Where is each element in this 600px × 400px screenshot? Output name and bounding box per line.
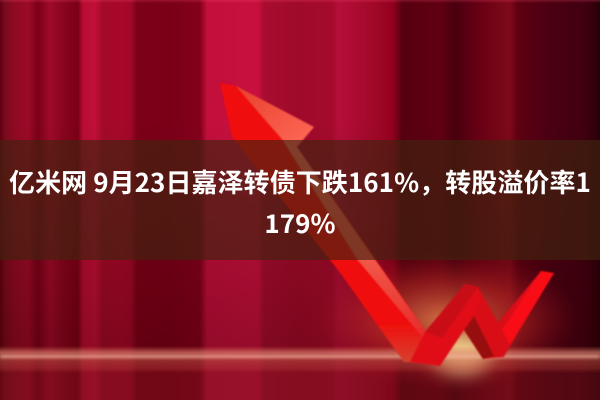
glow halo behind zigzag	[310, 250, 580, 390]
title text: 179%	[264, 204, 336, 241]
arrow head light face	[236, 86, 314, 147]
title text	[9, 163, 591, 241]
title band overlay	[0, 140, 600, 260]
floor light streak	[0, 346, 600, 400]
icon: arrow head and shaft	[220, 83, 432, 362]
title text: 亿米网 9月23日嘉泽转债下跌161%，转股溢价率1	[9, 163, 591, 200]
icon: zigzag W	[410, 271, 554, 366]
arrow shaft light strip	[283, 140, 432, 340]
